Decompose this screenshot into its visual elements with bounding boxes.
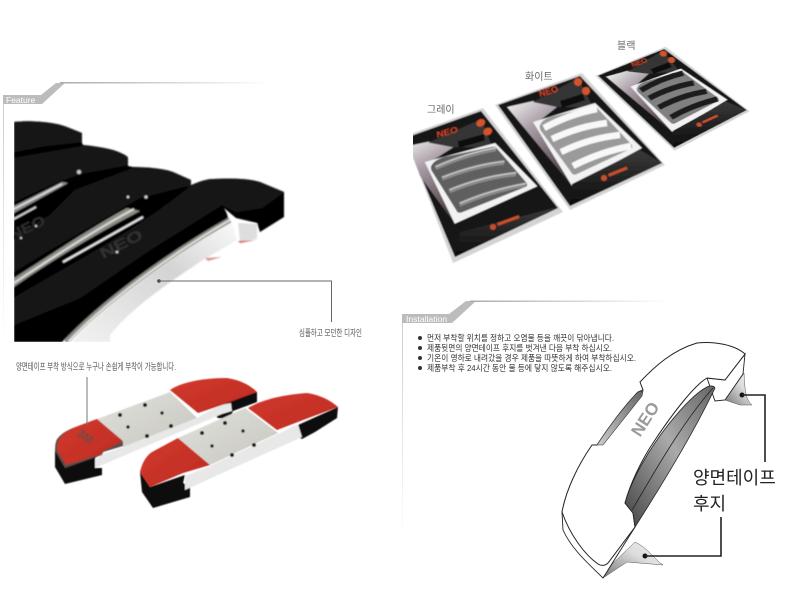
- tape brand mark: 3M: [74, 426, 96, 447]
- label: double sided tape backing paper: [693, 468, 776, 514]
- package: white: NEO: [538, 84, 559, 99]
- section header: Feature: [3, 82, 272, 344]
- left guard: [55, 378, 257, 484]
- photo: guards showing red tape backing: [55, 378, 338, 508]
- callout: simple modern design: 심플하고 모던한 디자인: [299, 328, 362, 338]
- product colour labels: 블랙: [617, 40, 635, 52]
- product colour labels: 화이트: [525, 71, 553, 83]
- section header: Feature: Feature: [6, 95, 36, 105]
- callout: backing paper top: [740, 392, 765, 462]
- adhesive backing top: [725, 373, 752, 405]
- package: grey: NEO: [436, 125, 458, 140]
- lower lip: [562, 512, 635, 578]
- product colour labels: 그레이: [427, 104, 455, 116]
- right guard: [140, 393, 338, 508]
- installation instructions list: 제품부착 후 24시간 동안 물 등에 닿지 않도록 해주십시오.: [427, 362, 612, 373]
- side slot: [597, 391, 643, 445]
- silver base: [72, 222, 237, 342]
- label: double sided tape backing paper: 양면테이프: [693, 468, 776, 488]
- adhesive backing bottom: [603, 542, 663, 578]
- right tab: [707, 354, 745, 401]
- package: grey: [413, 108, 563, 263]
- NEO logo: NEO: [627, 399, 663, 440]
- main body: [562, 342, 745, 565]
- upper slot chrome: [14, 182, 68, 213]
- diagram: NEO guard line drawing: [562, 342, 752, 578]
- photo: close-up of black door handle guards: NEO: [7, 212, 48, 243]
- package: black: [591, 42, 756, 155]
- installation instructions list: 기온이 영하로 내려갔을 경우 제품을 따뜻하게 하여 부착하십시오.: [427, 352, 636, 363]
- caption: double sided tape: 양면테이프 부착 방식으로 누구나 손쉽게 부착이 가능합니다.: [16, 362, 176, 373]
- photo: close-up of black door handle guards: [7, 121, 284, 342]
- leader line to tape: [86, 377, 88, 425]
- glints: [116, 251, 118, 253]
- installation instructions list: 제품뒷면의 양면테이프 후지를 벗겨낸 다음 부착 하십시오.: [427, 343, 612, 353]
- package: white: [495, 73, 665, 210]
- NEO embossing: NEO: [97, 226, 146, 263]
- middle slot chrome: [14, 208, 140, 287]
- section header: Installation: [402, 300, 670, 543]
- product colour labels: [427, 40, 635, 116]
- installation instructions list: [418, 332, 636, 373]
- lit top faces: [14, 121, 82, 152]
- label: double sided tape backing paper: 후지: [693, 494, 726, 514]
- inner grip recess: [625, 386, 715, 527]
- callout: backing paper bottom: [642, 517, 721, 558]
- callout: simple modern design: [157, 279, 362, 338]
- installation instructions list: 먼저 부착할 위치를 정하고 오염물 등을 깨끗이 닦아냅니다.: [427, 332, 614, 343]
- main chrome trim: [66, 220, 230, 342]
- package: black: NEO: [630, 56, 649, 69]
- black silhouette of stacked guards: [14, 121, 284, 342]
- section header: Installation: Installation: [406, 314, 447, 324]
